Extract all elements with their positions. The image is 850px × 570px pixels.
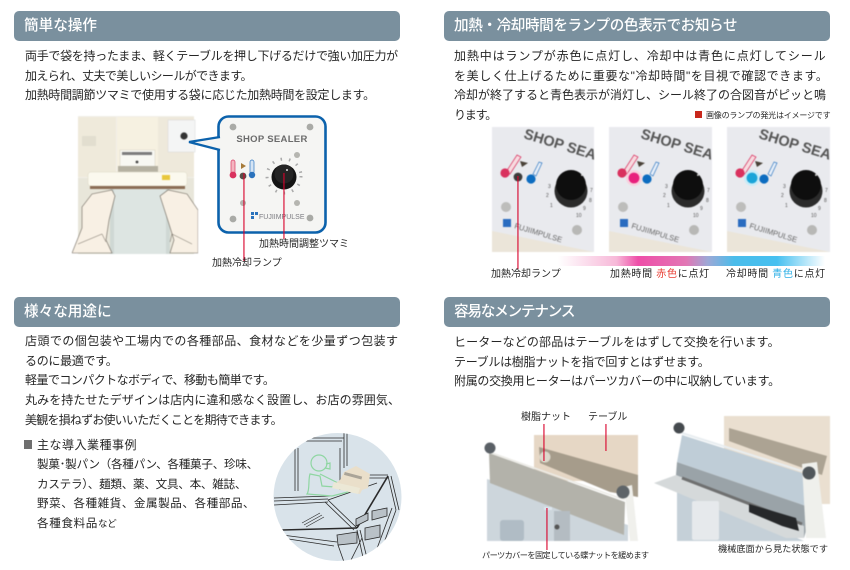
photo: lamp heating red: 9	[700, 206, 703, 212]
photo: lamp cooling blue: FUJIIMPULSE	[748, 221, 798, 244]
photo: lamp cooling blue	[726, 127, 830, 252]
list body: カステラ）、麺類、薬、文具、本、雑誌、	[37, 478, 246, 491]
leader line: table	[605, 424, 606, 451]
photo: lamp heating red: FUJIIMPULSE	[630, 221, 680, 244]
text: maintenance description: 附属の交換用ヒーターはパーツカバーの中に収納しています。	[454, 374, 780, 388]
label: parts cover wing nut: パーツカバーを固定している蝶ナットを緩めます	[482, 551, 649, 560]
photo: table removal	[484, 434, 639, 542]
text: easy operation description: 加えられ、丈夫で美しいシールができます。	[25, 69, 252, 83]
text: various uses description	[25, 334, 400, 427]
text: easy operation description	[25, 49, 398, 102]
heading: various uses	[14, 297, 400, 327]
photo: lamp heating red	[608, 127, 712, 252]
photo: lamp off: 8	[589, 198, 592, 204]
photo: lamp cooling blue: 2	[781, 193, 784, 199]
list: main industries	[24, 438, 258, 530]
heading: various uses: 様々な用途に	[24, 304, 112, 320]
list heading: 主な導入業種事例	[37, 438, 137, 452]
heading: easy operation	[14, 11, 400, 41]
photo: lamp off: 9	[583, 206, 586, 212]
note: lamp image disclaimer: 画像のランプの発光はイメージです	[706, 111, 830, 120]
photo: lamp cooling blue: 9	[818, 206, 821, 212]
photo: lamp cooling blue: 7	[825, 188, 828, 194]
heading: lamp colour indication	[444, 11, 830, 41]
leader line: lamp	[243, 173, 244, 261]
list body: 野菜、各種雑貨、金属製品、各種部品、	[37, 497, 255, 510]
photo: lamp off: 3	[548, 184, 551, 190]
photo: lamp off: 10	[576, 213, 582, 219]
label: heating and cooling lamp: 加熱冷却ランプ	[212, 258, 282, 269]
text: maintenance description: ヒーターなどの部品はテーブルをはずして交換を行います。	[454, 335, 780, 349]
leader line: resin nut	[543, 424, 544, 461]
heading: easy maintenance	[444, 297, 830, 327]
photo: lamp cooling blue: 1	[785, 203, 788, 209]
gradient bar: heating to cooling	[558, 256, 825, 266]
text: lamp colour description	[454, 49, 829, 122]
text: easy operation description: 加熱時間調節ツマミで使用する袋に応じた加熱時間を設定します。	[25, 88, 375, 102]
leader line: lamp in photo	[517, 176, 518, 269]
photo: lamp off: 2	[546, 193, 549, 199]
text: various uses description: 軽量でコンパクトなボディで、移動も簡単です。	[25, 373, 274, 387]
label: resin nut: 樹脂ナット	[521, 412, 571, 423]
photo: lamp heating red: 8	[706, 198, 709, 204]
list body: 各種食料品など	[37, 517, 116, 530]
caption: seen from machine bottom: 機械底面から見た状態です	[718, 544, 828, 554]
photo: lamp heating red: 7	[707, 188, 710, 194]
photo: lamp cooling blue: 3	[783, 184, 786, 190]
photo: lamp heating red: 2	[663, 193, 666, 199]
label: lamp: 加熱冷却ランプ	[491, 269, 561, 280]
photo: lamp cooling blue: 10	[811, 213, 817, 219]
heading: easy maintenance: 容易なメンテナンス	[454, 304, 574, 320]
callout: control panel close-up: SHOP SEALER	[236, 134, 308, 145]
callout: control panel close-up	[217, 115, 327, 234]
heading: easy operation: 簡単な操作	[24, 18, 97, 34]
text: maintenance description: テーブルは樹脂ナットを指で回すとはずせます。	[454, 355, 709, 369]
list body: 製菓･製パン（各種パン、各種菓子、珍味、	[37, 458, 258, 471]
label: heating time red: 加熱時間 赤色に点灯	[610, 269, 710, 280]
label: table: テーブル	[588, 412, 627, 423]
illustration: shop counter in circle	[274, 433, 402, 561]
photo: lamp off	[492, 127, 595, 252]
list body	[37, 458, 258, 530]
photo: lamp cooling blue: 8	[824, 198, 827, 204]
text: various uses description: 店頭での個包装や工場内での各種部品、食材などを少量ずつ包装す	[25, 334, 399, 348]
text: various uses description: 美観を損ねずお使いいただくことを期待できます。	[25, 413, 282, 427]
photo: lamp off: 7	[590, 188, 593, 194]
text: easy operation description: 両手で袋を持ったまま、軽くテーブルを押し下げるだけで強い加圧力が	[25, 49, 398, 63]
text: maintenance description	[454, 335, 780, 388]
photo: lamp heating red: 10	[693, 213, 699, 219]
text: lamp colour description: を美しく仕上げるために重要な"冷却時間"を目視で確認できます。	[454, 69, 829, 83]
leader line: wing nut	[546, 508, 548, 550]
label: cooling time blue: 冷却時間 青色に点灯	[726, 269, 826, 280]
text: lamp colour description: 加熱中はランプが赤色に点灯し、冷却中は青色に点灯してシール	[454, 49, 827, 63]
arrow: callout pointer	[188, 136, 220, 152]
photo: lamp off: 1	[550, 203, 553, 209]
heading: lamp colour indication: 加熱・冷却時間をランプの色表示でお知らせ	[454, 18, 737, 34]
text: various uses description: るのに最適です。	[25, 354, 117, 368]
leader line: knob	[283, 173, 284, 239]
label: time adjust knob: 加熱時間調整ツマミ	[259, 239, 349, 250]
text: various uses description: 丸みを持たせたデザインは店内に違和感なく設置し、お店の雰囲気、	[25, 393, 400, 407]
photo: lamp heating red: 3	[665, 184, 668, 190]
text: lamp colour description: ります。	[454, 108, 496, 122]
callout: control panel close-up: FUJIIMPULSE	[259, 214, 305, 221]
text: lamp colour description: 冷却が終了すると青色表示が消灯し、シール終了の合図音がピッと鳴	[454, 88, 826, 102]
photo: lamp off: FUJIIMPULSE	[513, 221, 563, 244]
photo: hands pressing sealer table	[71, 116, 199, 254]
photo: lamp heating red: 1	[667, 203, 670, 209]
photo: machine bottom view	[654, 416, 830, 542]
